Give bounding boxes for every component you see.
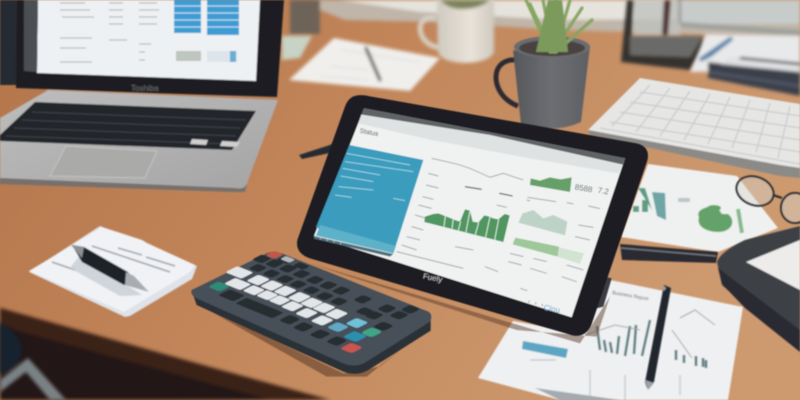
laptop trackpad (50, 146, 157, 178)
tablet pale area chart (518, 210, 567, 235)
paper bars (633, 188, 652, 212)
tablet right labels (455, 197, 600, 291)
notepad text lines (52, 246, 175, 272)
dark keys (195, 249, 424, 350)
mug handle (496, 60, 518, 106)
calculator body (191, 252, 431, 365)
shadow of pen (70, 255, 142, 296)
tablet corner brand: Clou (543, 303, 561, 315)
tablet small green area chart (530, 177, 572, 192)
tablet bar gaps (444, 211, 499, 240)
plant leaves (526, 0, 592, 52)
laptop screen bezel (16, 0, 284, 97)
small black pen behind tablet (299, 143, 336, 159)
laptop left background (0, 0, 17, 85)
tablet taskbar dots (320, 238, 543, 305)
laptop brand name: Toshiba (131, 84, 159, 93)
pen under paper (620, 244, 718, 263)
laptop display side grey (24, 0, 38, 72)
pen on report (645, 285, 671, 390)
black pen (72, 245, 135, 285)
tablet bezel logo: Fuely (422, 271, 443, 284)
paper with pen behind tablet (289, 38, 440, 91)
report title: Business Report (612, 290, 649, 302)
notepad sheets (29, 226, 197, 317)
chair back (0, 322, 66, 400)
tablet screen (314, 108, 625, 317)
laptop keyboard (0, 102, 256, 150)
tablet bezel (297, 95, 648, 336)
paper with green charts right of tablet (621, 164, 778, 252)
laptop (0, 0, 284, 192)
tablet stand (590, 277, 612, 310)
laptop display (37, 0, 260, 81)
tablet app logo: Status (359, 128, 379, 138)
sidebar menu lines (335, 153, 413, 201)
paper pie chart (698, 207, 732, 232)
small notepad with pen (29, 226, 197, 317)
tablet shadow (310, 263, 610, 343)
tablet green table band (513, 238, 559, 257)
coloured keys (265, 251, 283, 259)
laptop mini charts (176, 51, 201, 61)
report paper with charts (478, 280, 743, 400)
calculator side (192, 291, 431, 374)
small bar charts (597, 320, 706, 368)
tablet green bar chart (424, 209, 510, 242)
tablet small figure: 7.2 (597, 186, 610, 197)
laptop table lines (174, 6, 239, 27)
white keyboard (588, 78, 800, 178)
white keys rows (210, 266, 351, 326)
tablet left labels (397, 173, 463, 268)
notebooks stack (690, 34, 800, 96)
tablet big numbers: 8588 (574, 182, 594, 194)
edge of desk and dark floor (0, 308, 330, 400)
tablet taskbar strip (314, 236, 393, 257)
tablet top bar (361, 108, 625, 165)
white coffee mug (420, 0, 494, 63)
glasses (732, 171, 800, 223)
calculator keys (193, 249, 431, 353)
tablet (297, 95, 648, 343)
grey mug with plant (496, 0, 592, 129)
laptop base (0, 90, 278, 190)
laptop blue tables (174, 0, 239, 35)
calculator (191, 249, 431, 377)
dark device bottom right (717, 226, 800, 352)
tablet blue sidebar (316, 145, 423, 253)
mug body (513, 46, 590, 129)
blue highlight bar (522, 341, 568, 358)
pen holder (621, 0, 704, 70)
soil (514, 36, 590, 58)
tablet line chart (432, 158, 523, 180)
keyboard key rows (600, 85, 800, 164)
paper curled bottom (535, 388, 620, 400)
calculator shadow (197, 303, 420, 377)
window sill and background (282, 0, 800, 60)
